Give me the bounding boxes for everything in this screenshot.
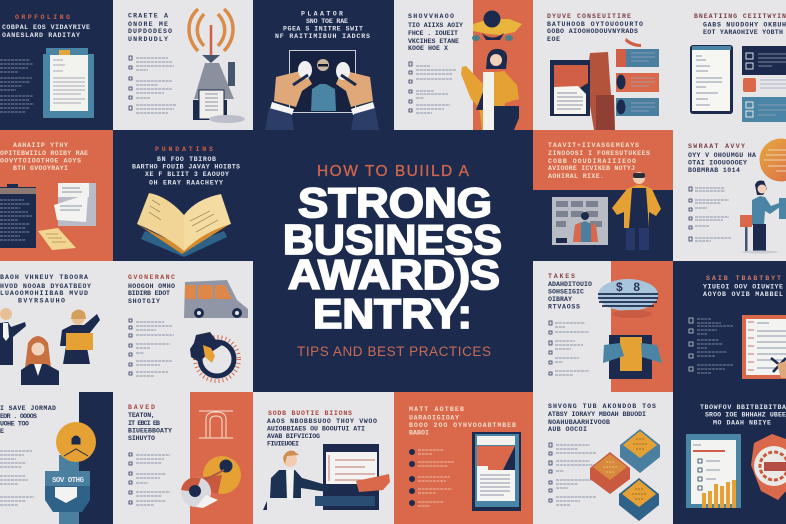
intro text: [128, 283, 175, 305]
intro text: EOT YARAOHIVE YOBTH: [703, 29, 783, 36]
navy band: [79, 392, 113, 524]
icon: isometric cube top: [620, 429, 660, 473]
checklist: [409, 62, 456, 113]
panel: takes: [533, 261, 673, 392]
heading text: PGEA S INITRE SWIT: [283, 26, 363, 32]
illustration: package: [603, 335, 662, 379]
panel: team: [0, 261, 113, 392]
panel background: [673, 0, 786, 130]
intro text: TEATON,: [128, 412, 155, 419]
panel: smart: [673, 130, 786, 261]
intro text: ADAHDITOUIO: [548, 281, 592, 288]
title: [283, 179, 502, 337]
intro text: SIHUYTO: [128, 435, 155, 442]
icon: document: [43, 48, 94, 118]
illustration: stacked papers: [54, 183, 96, 226]
orange band: [473, 0, 533, 130]
checklist: [129, 453, 170, 505]
icon: disc: [181, 477, 218, 508]
heading text: [128, 12, 172, 43]
heading text: MATT AOTBEB: [409, 406, 464, 413]
intro text: FIUIEUOEI: [267, 440, 299, 448]
intro text: EOE: [547, 36, 560, 43]
heading: BAVED: [128, 404, 155, 411]
intro text: BATUHOOB OYTOUOOURTO: [547, 21, 643, 28]
heading text: ONORE ME: [128, 21, 168, 28]
intro text: [688, 152, 756, 174]
intro text: [548, 281, 592, 310]
heading: DYUVE CONSEUITIRE: [547, 13, 631, 20]
intro text: [703, 22, 786, 36]
heading: PUNDATINS: [155, 146, 213, 153]
panel background: [253, 392, 394, 524]
orange band: [611, 261, 673, 392]
panel: save award: [0, 392, 113, 524]
heading text: BVYRSAUHO: [18, 298, 65, 304]
panel: travel: [533, 130, 673, 261]
heading text: UNRDUDLY: [128, 36, 168, 43]
cards: [616, 49, 659, 116]
panel: create a: [113, 0, 253, 130]
intro text: AVAB BIFVICIOG: [267, 433, 320, 440]
panel: center title: [253, 130, 533, 392]
panel background: [0, 0, 113, 130]
checklist: [129, 56, 176, 113]
intro text: GABS NUODOHY OKBUH: [703, 22, 786, 28]
intro text: AAOS NBOBBSUOO THOY VWOO: [267, 418, 377, 425]
intro text: [132, 156, 240, 186]
panel background: [0, 261, 113, 392]
intro text: [547, 21, 643, 43]
heading text: E: [0, 428, 4, 435]
heading: SWRAAT AVVY: [688, 143, 745, 150]
icon: yellow hat: [472, 10, 522, 41]
icon: striped pillbox with symbols: $ 8: [616, 280, 640, 294]
heading text: TAAVIT+IIVASGEMEAYS: [548, 142, 639, 149]
checklist: [689, 318, 733, 373]
illustration: office window: [552, 197, 608, 245]
panel background: [673, 130, 786, 261]
illustration: hand holding document: [550, 38, 641, 130]
heading text: [700, 404, 786, 426]
heading: SAIB TBABTBYT: [706, 275, 781, 282]
panel background: [253, 130, 533, 392]
heading: BNEATIING CEIITWYIN: [694, 13, 786, 20]
icon: signal tower: [189, 9, 245, 123]
intro text: BOBMRAB 1014: [688, 167, 740, 174]
heading text: COBB OOUDIRAIIIEOO: [548, 158, 636, 165]
checklist: [129, 319, 174, 376]
heading text: AOHIRAL RIXE.: [548, 173, 604, 180]
panel background: [253, 0, 393, 130]
heading text: [548, 142, 650, 180]
title: STRONG: [298, 179, 492, 226]
document with hand: [742, 315, 786, 379]
heading text: KOOE HOE X: [408, 45, 448, 52]
intro text: OIBRAY: [548, 296, 572, 303]
title kicker: HOW TO BUIILD A: [317, 163, 470, 180]
intro text: OANESLARD RADITAY: [2, 32, 80, 39]
heading text: [275, 10, 370, 40]
heading text: BTH GVOOYRAYI: [13, 165, 68, 172]
panel: governance: [113, 261, 253, 392]
intro text: [267, 418, 377, 448]
icon: seal badge: [751, 434, 786, 500]
icon: sticky note: [38, 228, 76, 250]
panel background: [673, 261, 786, 392]
heading text: OOVYTOIOOTHOE AOYS: [0, 158, 81, 164]
illustration: man with vr visor: [612, 172, 661, 250]
intro text: AUB OOCOI: [548, 426, 587, 433]
illustration: video frame and hands: [265, 50, 379, 130]
icon: pie chart: [203, 456, 241, 494]
heading text: OPITEBWIILO ROIBY RAE: [0, 150, 88, 157]
intro text: OYY V OHOUMGU HA: [688, 152, 756, 159]
intro text: COBPAL EOS VIDAYRIVE: [2, 24, 90, 31]
panel: summary: [0, 130, 113, 261]
heading text: BOOO 2OO OYHVOOABTMBEB: [409, 422, 516, 429]
panel background: [113, 261, 253, 392]
heading text: LUAOOMOHIIBAB MVUD: [0, 290, 88, 297]
info boxes: [742, 46, 786, 122]
panel background: [394, 0, 473, 130]
intro text: HOOGOH OMHO: [128, 283, 175, 290]
panel: brand: [113, 392, 253, 524]
intro text: [128, 412, 172, 442]
intro text: [548, 411, 646, 433]
checklist: [409, 449, 454, 506]
intro text: BARTHO FOUIB JAVAY HOIBTS: [132, 164, 240, 170]
intro text: IT EBCI EB: [128, 420, 160, 427]
heading text: [409, 406, 516, 436]
heading text: TBOWFOV BBITBIBITBA: [700, 404, 786, 411]
panel upper background: [533, 130, 673, 190]
intro text: RTVAOSS: [548, 304, 580, 310]
panel lower background: [533, 190, 673, 261]
icon: isometric cube bottom: [619, 478, 659, 521]
heading text: I SAVE JORMAD: [0, 405, 56, 412]
icon: speech bubble: [760, 138, 786, 182]
illustration: right woman: [60, 310, 100, 364]
subtitle: TIPS AND BEST PRACTICES: [297, 344, 491, 359]
intro text: OH ERAY RAACHEYY: [149, 180, 223, 186]
panel: opening: [0, 0, 113, 130]
illustration: presenter: [740, 180, 786, 254]
heading text: [408, 13, 463, 52]
heading text: [0, 142, 88, 172]
heading text: TIO AIIXS AOIY: [408, 22, 463, 29]
heading text: UARAOIGIOAY: [409, 414, 459, 422]
title: ENTRY:: [313, 290, 472, 337]
heading text: SROO IOE BHHAHZ UBEE: [705, 412, 786, 418]
title: AWARD)S: [288, 251, 500, 298]
panel: good solutions: [253, 392, 394, 524]
panel: showing: [533, 392, 673, 524]
heading text: AAHAIIP YTHY: [13, 142, 68, 149]
heading text: UOHE TOO: [0, 420, 29, 428]
checklist: [689, 187, 731, 241]
checklist: [549, 321, 589, 375]
icon: open book: [137, 193, 231, 257]
panel background: [673, 392, 786, 524]
intro text: YIUEOI OOV OIUWIYE: [703, 284, 783, 290]
heading text: VKCIHES ETANE: [408, 38, 459, 45]
heading: TAKES: [548, 273, 575, 280]
intro text: BIUEEBBOATY: [128, 428, 172, 434]
illustration: left man: [0, 308, 26, 365]
illustration: report with bars: [686, 434, 741, 508]
panel: drive consulting: [533, 0, 673, 130]
icon: tablet: [690, 45, 733, 114]
panel: showcase: [394, 0, 533, 130]
panel: breaking: [673, 0, 786, 130]
panel: matt actors: [394, 392, 533, 524]
illustration: woman presenting: [461, 49, 519, 130]
panel: foundations: [113, 130, 253, 261]
heading text: SNO TOE RAE: [306, 18, 348, 25]
panel background: [533, 392, 673, 524]
heading text: BABOI: [409, 430, 429, 436]
heading text: BAOH VHNEUY TBOORA: [0, 274, 88, 281]
illustration: dark document: [0, 184, 36, 248]
icon: dial with gear: [190, 332, 239, 381]
intro text: BN FOO TBIROB: [157, 156, 216, 163]
icon: arch: [199, 411, 233, 438]
heading: SODB BUOTIE BIIONS: [268, 410, 352, 417]
icon: isometric cube middle: [590, 452, 630, 494]
panel background: [0, 130, 113, 261]
heading: SHVONG TUB AKONDOB TOS: [548, 403, 656, 410]
body text lines: [0, 60, 34, 112]
intro text: BIDIRB EDOT: [128, 290, 170, 297]
intro text: AOYOB OVIB MABBEL: [703, 291, 783, 298]
panel background: [113, 0, 253, 130]
checklist: [549, 443, 596, 505]
intro text: [2, 24, 90, 39]
panel: sales strategy: [673, 261, 786, 392]
panel background: [113, 130, 253, 261]
intro text: SOHSEIGIC: [548, 288, 584, 296]
orange band: [190, 392, 253, 524]
panel: trust: [673, 392, 786, 524]
intro text: GOBO AIOOHODOUVNYRADS: [547, 28, 638, 35]
intro text: OTAI IOOUOOOEY: [688, 160, 747, 166]
icon: van: [184, 280, 248, 318]
heading text: [0, 274, 91, 304]
title: BUSINESS: [283, 216, 502, 263]
icon: award ribbon: SOV OTHG: [52, 477, 84, 485]
heading text: DUPDODESO: [128, 28, 172, 35]
panel background: [533, 261, 611, 392]
heading text: EOR . OOOOS: [0, 413, 37, 420]
heading text: PLAATOR: [301, 10, 343, 18]
intro text: SHOTGIY: [128, 298, 160, 305]
heading text: MO DAAH NBIYE: [713, 420, 771, 426]
heading text: ZINOOOSI I FORESUTUKEES: [548, 150, 650, 157]
heading text: FHCE . IOUEIT: [408, 30, 458, 37]
intro text: [703, 284, 783, 298]
heading text: SHOVVHAOO: [408, 13, 454, 20]
panel background: [0, 392, 79, 524]
panel: plan: [253, 0, 393, 130]
intro text: ATBSY IORAYY MBOAH BBUODI: [548, 411, 646, 418]
heading text: NF RAITIMIBUH IADCRS: [275, 33, 370, 40]
intro text: NOAHUBAARHIVOOB: [548, 419, 610, 426]
illustration: report cover: [472, 432, 521, 511]
heading text: [0, 405, 56, 435]
panel background: [394, 392, 533, 524]
heading text: AVIOORE ICVIKEB NOTYJ: [548, 165, 635, 172]
illustration: man pointing: [263, 451, 390, 510]
heading: GVONERANC: [128, 274, 175, 281]
heading text: CRAETE A: [128, 12, 168, 20]
heading text: HVOD NOOAB DYGATBEOY: [0, 283, 91, 290]
intro text: AUIOBBIAES OU BOOUTUI ATI: [267, 426, 365, 432]
panel background: [533, 0, 673, 130]
illustration: presentation screen: [315, 444, 379, 510]
illustration: center woman: [21, 336, 59, 385]
heading: ORPFOLING: [15, 14, 70, 21]
checklist lines: [0, 451, 34, 505]
intro text: XE F BLIIT 3 EAOUOY: [145, 171, 229, 178]
panel background: [113, 392, 190, 524]
